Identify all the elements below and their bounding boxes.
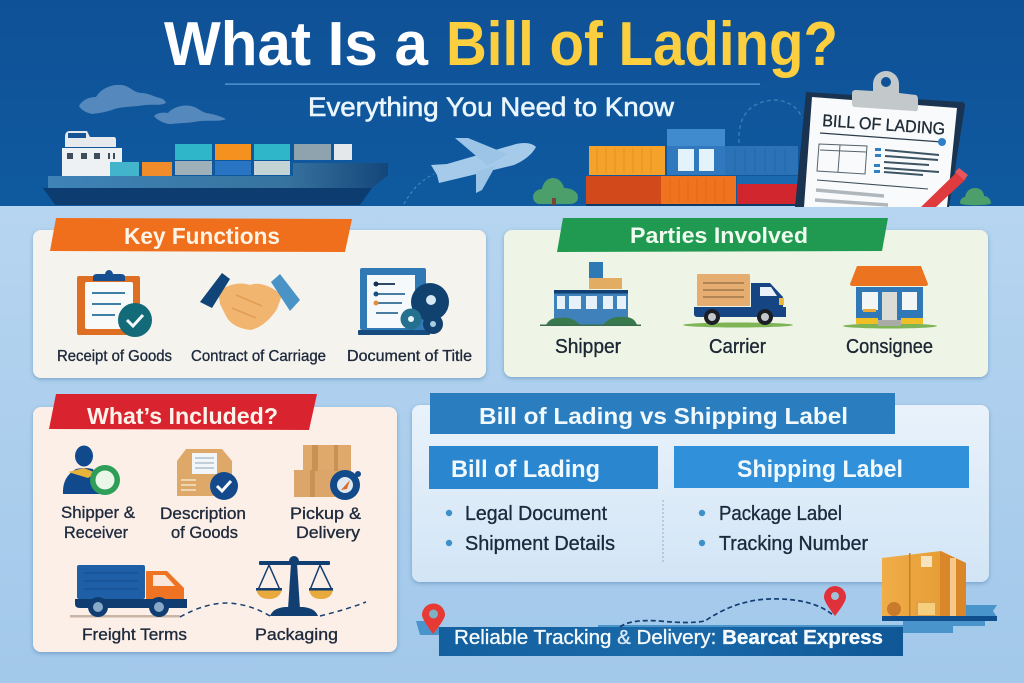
ribbon: key functions heading: Key Functions [124, 223, 280, 249]
icon: receipt clipboard [77, 270, 152, 337]
column heading: shipping label: Shipping Label [737, 456, 903, 483]
label: description of goods: of Goods [171, 523, 238, 542]
label: shipper and receiver: Receiver [64, 523, 128, 542]
label: pickup and delivery: Delivery [296, 523, 361, 542]
label: description of goods [160, 504, 246, 542]
icon: left location pin [422, 604, 445, 634]
label: shipper: Shipper [555, 336, 621, 358]
icon: freight truck [70, 565, 187, 618]
panel: bill of lading vs shipping label [412, 393, 989, 582]
icon: right location pin [824, 586, 846, 616]
icon: airplane [404, 138, 536, 204]
icon: bill of lading clipboard [795, 71, 965, 207]
label: document of title: Document of Title [347, 348, 472, 365]
icon: clouds [79, 85, 226, 124]
label: shipper and receiver: Shipper & [61, 503, 136, 522]
list: bill of lading points [446, 503, 615, 555]
icon: pickup and delivery [294, 445, 361, 500]
ribbon: what's included heading [49, 394, 317, 430]
list: shipping label points [699, 503, 868, 555]
label: pickup and delivery: Pickup & [290, 504, 362, 523]
icon: scales [256, 556, 333, 616]
footer tracking banner [416, 551, 997, 656]
list: bill of lading points: Legal Document [465, 503, 607, 525]
icon: bill of lading clipboard: BILL OF LADING [822, 111, 946, 139]
list: bill of lading points: Shipment Details [465, 533, 615, 555]
label: pickup and delivery [290, 504, 362, 542]
header banner [0, 0, 1024, 207]
icon: carrier truck [683, 274, 793, 328]
title: Bill of Lading? [446, 10, 838, 79]
icon: dashed tracking route [620, 599, 833, 627]
comparison heading: Bill of Lading vs Shipping Label [479, 403, 848, 429]
panel: what's included [33, 394, 397, 652]
label: description of goods: Description [160, 504, 246, 523]
column heading: bill of lading [429, 446, 658, 489]
icon: handshake [200, 273, 300, 330]
banner text: Reliable Tracking & Delivery: Bearcat Express [454, 627, 883, 649]
icon: document of title [358, 268, 449, 335]
icon: trees [533, 178, 991, 205]
ribbon: what's included heading: What’s Included? [87, 403, 278, 429]
ribbon: parties involved heading: Parties Involved [630, 223, 808, 248]
column heading: shipping label [674, 446, 969, 488]
comparison heading [430, 393, 895, 434]
icon: consignee house [843, 266, 937, 328]
label: shipper and receiver [61, 503, 136, 542]
column heading: bill of lading: Bill of Lading [451, 456, 600, 483]
title divider [225, 84, 760, 85]
icon: stacked containers and warehouse [586, 100, 802, 206]
ribbon: key functions heading [50, 218, 352, 252]
label: carrier: Carrier [709, 336, 766, 358]
label: receipt of goods: Receipt of Goods [57, 348, 172, 365]
panel: parties involved [504, 218, 988, 377]
label: consignee: Consignee [846, 336, 933, 358]
list: shipping label points: Tracking Number [719, 533, 868, 555]
title [164, 10, 838, 79]
ribbon: parties involved heading [557, 218, 888, 252]
label: freight terms: Freight Terms [82, 625, 187, 644]
icon: red pen [921, 168, 968, 207]
icon: parcel box [882, 551, 966, 616]
list: shipping label points: Package Label [719, 503, 842, 525]
label: packaging: Packaging [255, 625, 338, 644]
icon: shipper warehouse [540, 262, 641, 326]
icon: dashed route [180, 602, 366, 617]
label: contract of carriage: Contract of Carriage [191, 348, 326, 365]
icon: container ship [43, 131, 388, 205]
icon: description of goods [177, 449, 238, 500]
icon: shipper and receiver [63, 446, 120, 495]
title: What Is a [164, 10, 428, 79]
panel: key functions [33, 218, 486, 378]
subtitle: Everything You Need to Know [308, 92, 675, 122]
